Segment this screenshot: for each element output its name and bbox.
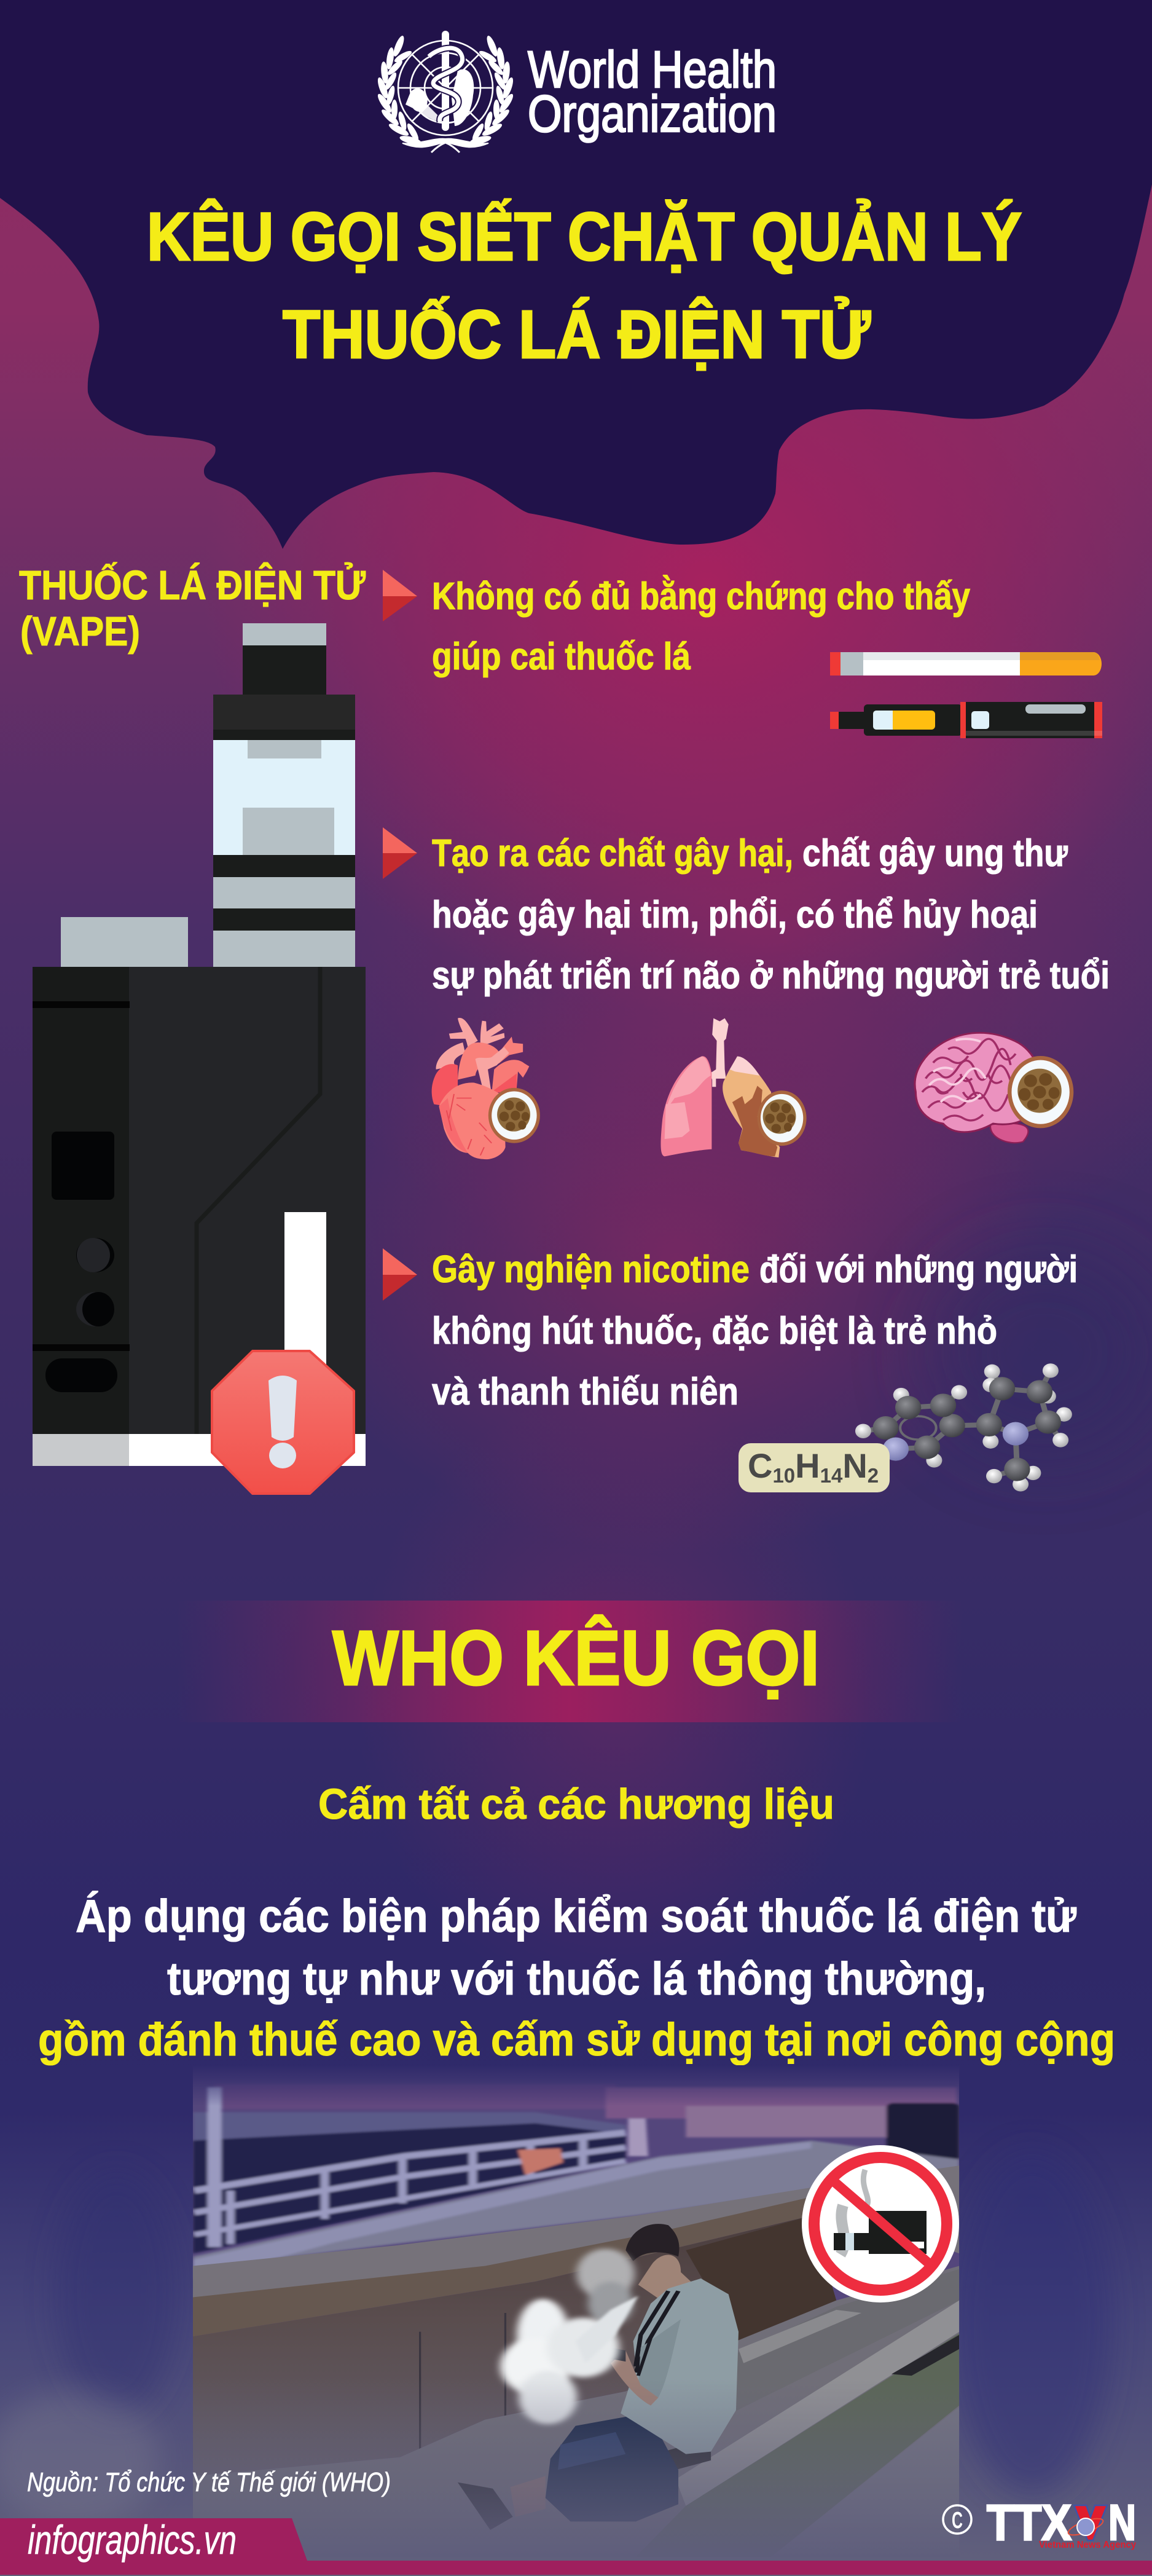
text: bullet 1 [432,575,970,678]
icon: lungs [660,1018,807,1157]
text: infographics.vn: infographics.vn [28,2517,237,2562]
logo: TTXVN: Vietnam News Agency [1039,2540,1136,2550]
icon: heart [432,1018,540,1159]
icon: tar circle [758,1090,807,1146]
icon: warning stop sign [212,1351,354,1494]
illustration: nicotine molecule [855,1363,1072,1492]
heading: vape label: (VAPE) [20,609,140,655]
label: chemical formula: C [748,1446,772,1485]
icon: WHO emblem [375,31,515,152]
illustration: vape device [33,623,366,1466]
text: bullet 2: hoặc gây hại tim, phổi, có thể hủy hoại [432,894,1038,936]
icon: cigarette [830,652,1102,676]
label: chemical formula: 10 [772,1464,795,1487]
photo: man vaping [193,2065,959,2557]
title: KÊU GỌI SIẾT CHẶT QUẢN LÝ [147,199,1022,275]
footer bar [0,2518,1152,2575]
logo: TTXVN: TTX [987,2495,1072,2551]
label: chemical formula: 14 [820,1464,843,1487]
text: bullet 1: giúp cai thuốc lá [432,636,691,678]
heading: vape label: THUỐC LÁ ĐIỆN TỬ [19,562,366,609]
arrow: bullet 3 [383,1248,417,1301]
label: chemical formula [739,1443,890,1492]
arrow: bullet 2 [383,827,417,879]
title [147,199,1022,372]
text: bullet 1: Không có đủ bằng chứng cho thấy [432,575,970,618]
icon: copyright: C [952,2508,963,2534]
arrow: bullet 1 [383,570,417,621]
text: control measures [38,1890,1115,2065]
icon: copyright [943,2505,971,2534]
text: bullet 3 [432,1248,1078,1413]
text: control measures: Áp dụng các biện pháp kiểm soát thuốc lá điện tử [76,1890,1077,1942]
text: source: Nguồn: Tổ chức Y tế Thế giới (WHO) [27,2467,391,2497]
speech-bubble header shape [0,0,1152,549]
text: bullet 2: Tạo ra các chất gây hại, [432,832,793,875]
text: bullet 2 [432,832,1110,997]
icon: no vaping sign [802,2145,959,2302]
wordmark: Organization [528,85,777,143]
icon: brain [915,1033,1073,1143]
banner: WHO kêu gọi: WHO KÊU GỌI [332,1615,820,1701]
banner: WHO kêu gọi [176,1601,963,1722]
logo: TTXVN [943,2495,1136,2551]
text: bullet 3: đối với những người [759,1248,1078,1291]
heading: vape label [19,562,366,655]
text: bullet 3: không hút thuốc, đặc biệt là trẻ nhỏ [432,1310,997,1352]
wordmark [528,41,777,143]
icon: e-cigarette [830,702,1102,738]
text: ban flavours: Cấm tất cả các hương liệu [318,1780,834,1828]
wordmark: World Health [528,41,777,98]
label: chemical formula: N [842,1446,868,1485]
title: THUỐC LÁ ĐIỆN TỬ [283,297,871,372]
logo: TTXVN: N [1108,2495,1136,2551]
text: bullet 3: Gây nghiện nicotine [432,1248,750,1291]
logo: WHO emblem and wordmark [375,31,777,152]
label: chemical formula: 2 [868,1464,879,1487]
label: chemical formula: H [795,1446,820,1485]
text: control measures: tương tự như với thuốc lá thông thường, [167,1953,986,2004]
icon: tar circle [488,1088,540,1143]
icon: tar circle [1008,1056,1073,1128]
text: bullet 2: chất gây ung thư [802,832,1068,875]
text: bullet 3: và thanh thiếu niên [432,1371,739,1413]
